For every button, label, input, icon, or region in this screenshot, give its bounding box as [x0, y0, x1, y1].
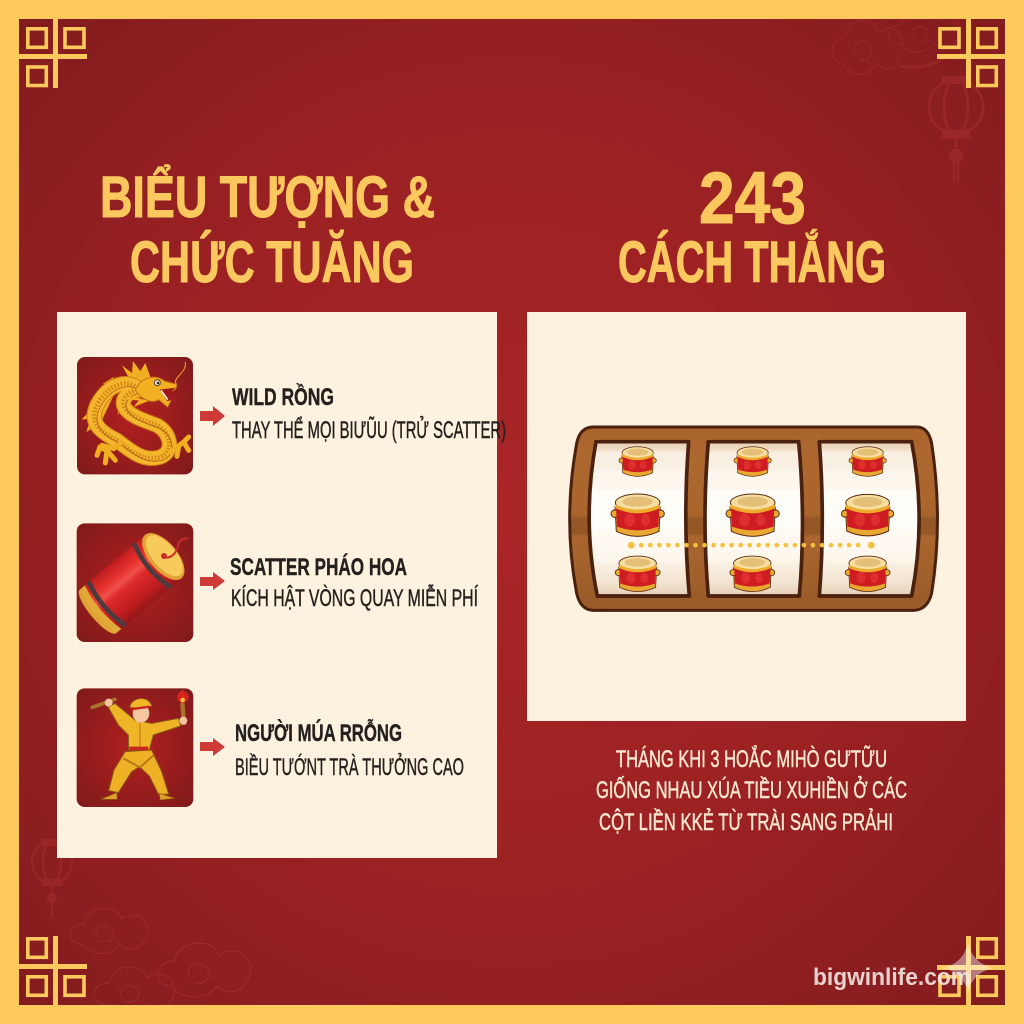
reel window 1	[589, 442, 689, 596]
icon: dragon dancer	[77, 688, 193, 807]
wooden frame	[570, 427, 937, 610]
arrow: scatter	[200, 572, 225, 590]
corner ornament: bottom left	[19, 936, 87, 1005]
panel: slot reel	[527, 312, 966, 721]
heading: symbols and functions	[100, 165, 435, 295]
text: dragon dancer	[235, 718, 464, 781]
watermark: bigwinlife.com	[813, 964, 971, 991]
text: explanation of 243 ways: CỘT LIỀN KKẺ TỪ TRÀI SANG PRẢHI	[599, 807, 893, 836]
panel: symbols list	[57, 312, 506, 858]
text: wild dragon	[232, 383, 506, 444]
heading: symbols and functions: BIỂU TƯỢNG &	[100, 165, 435, 230]
reel window 3	[819, 442, 919, 596]
text: scatter firework	[230, 553, 478, 612]
corner ornament: bottom right	[937, 936, 1005, 1005]
payline dots	[628, 542, 875, 548]
decorative lantern top right	[929, 77, 983, 183]
corner ornament: top left	[19, 19, 87, 88]
heading: symbols and functions: CHỨC TUĂNG	[130, 230, 414, 295]
corner ornament: top right	[937, 19, 1005, 88]
reel window 2	[705, 442, 802, 596]
decorative clouds top right	[832, 19, 960, 74]
text: dragon dancer: BIỀU TƯỚNT TRÀ THƯỞNG CAO	[235, 752, 464, 781]
text: scatter firework: SCATTER PHÁO HOA	[230, 553, 407, 581]
text: explanation of 243 ways	[596, 745, 907, 836]
text: wild dragon: WILD RỒNG	[232, 383, 334, 411]
arrow: dancer	[200, 738, 225, 756]
text: explanation of 243 ways: THÁNG KHI 3 HOẮC MIHÒ GƯTỮU	[616, 745, 887, 773]
icon: firecracker	[73, 523, 193, 642]
icon: golden dragon	[77, 357, 193, 474]
text: wild dragon: THAY THỂ MỌI BIƯŨU (TRỬ SCATTER)	[232, 415, 506, 444]
text: scatter firework: KÍCH HẬT VÒNG QUAY MIỄN PHÍ	[231, 583, 478, 612]
arrow: wild	[200, 406, 225, 426]
sparkle	[943, 942, 993, 993]
heading: 243 ways to win: CÁCH THẮNG	[618, 230, 886, 295]
heading: 243 ways to win	[618, 158, 886, 295]
heading: 243 ways to win: 243	[699, 158, 806, 239]
decorative clouds bottom	[71, 908, 251, 1014]
slot machine	[570, 427, 937, 610]
text: dragon dancer: NGƯỜI MÚA RRỖNG	[235, 718, 402, 747]
decorative lantern bottom left	[32, 840, 72, 918]
drums	[611, 447, 894, 592]
